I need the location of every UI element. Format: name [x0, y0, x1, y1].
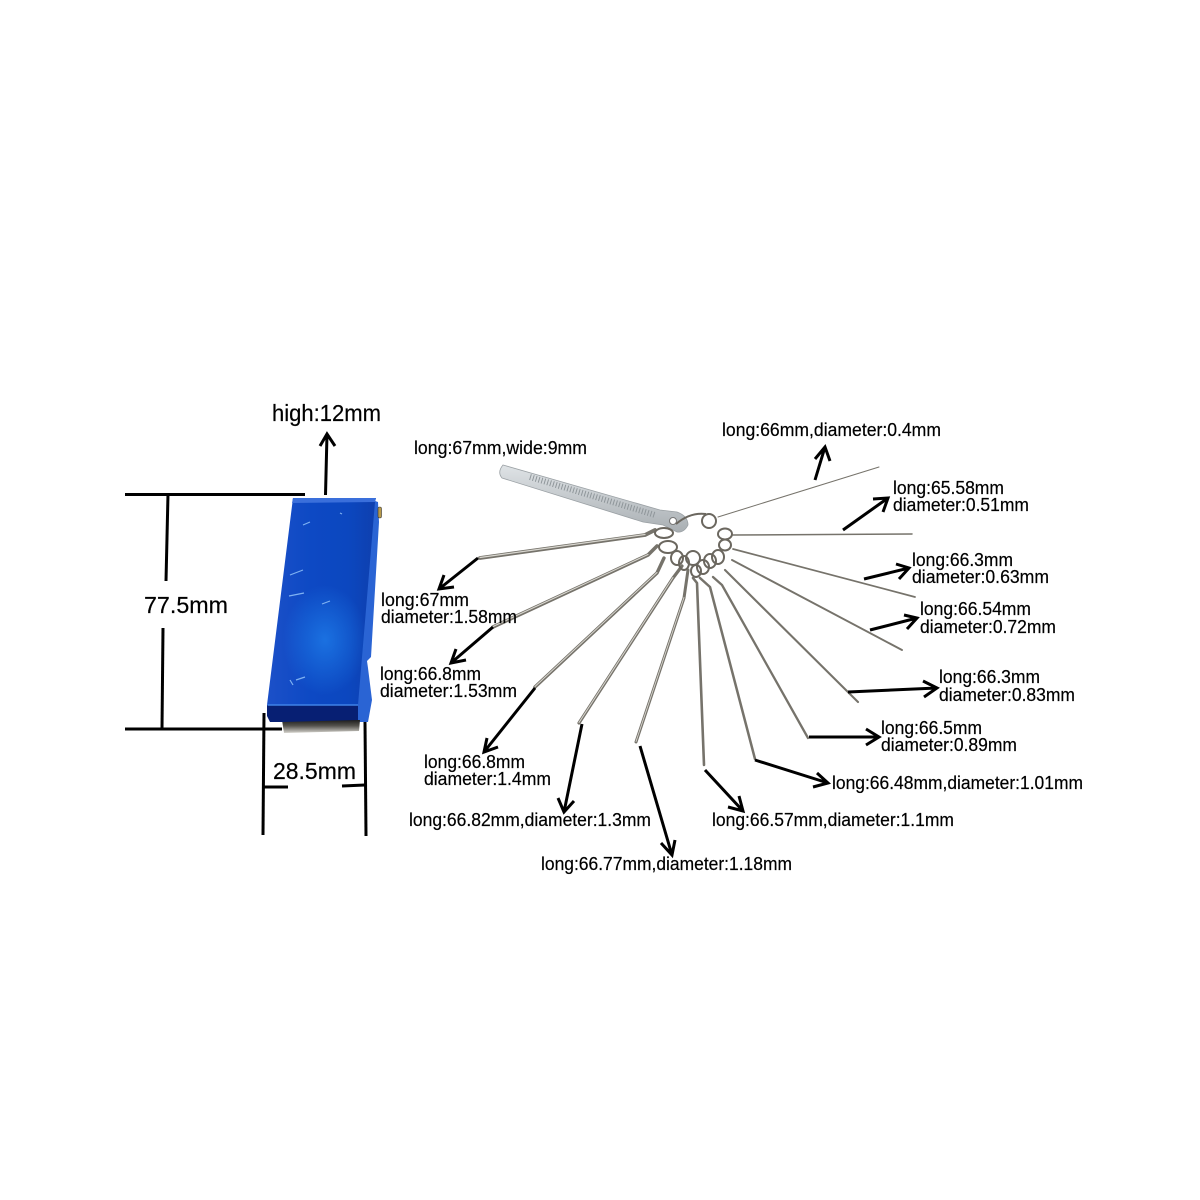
- arrow: [640, 746, 675, 855]
- dimension: 28.5mm width: [263, 713, 366, 836]
- case front face: [267, 498, 376, 705]
- key ring wire: [676, 514, 706, 524]
- label: long:67mm: [381, 590, 469, 610]
- label: long:66.5mm: [881, 718, 982, 738]
- wire gauge set photo: [480, 465, 915, 765]
- needles right thin: [693, 467, 915, 765]
- callout: 0.72mm wire: [870, 599, 1056, 637]
- right tick: [342, 785, 365, 786]
- label: long:66.54mm: [920, 599, 1031, 619]
- label: long:66.57mm,diameter:1.1mm: [712, 810, 954, 830]
- arrow up: [320, 434, 335, 495]
- handle hole: [670, 518, 676, 524]
- callout: 1.3mm wire: [409, 724, 651, 830]
- callout: 0.83mm wire: [848, 667, 1075, 705]
- arrow: [755, 760, 828, 787]
- callout: 1.53mm wire: diameter:1.53mm: [380, 681, 517, 701]
- arrow: [484, 688, 535, 752]
- arrow: [864, 564, 909, 579]
- callout: 0.83mm wire: diameter:0.83mm: [939, 685, 1075, 705]
- arrow: [843, 498, 888, 530]
- callout: 1.4mm wire: diameter:1.4mm: [424, 769, 551, 789]
- case side strip: [356, 500, 379, 722]
- case bottom highlight: [268, 704, 358, 706]
- arrow: [439, 558, 478, 589]
- right extension line: [365, 722, 366, 836]
- dimension: high 12mm: [272, 400, 381, 495]
- label high: high:12mm: [272, 400, 381, 426]
- arrow: [705, 770, 743, 811]
- upper vertical: [166, 494, 168, 581]
- bottom extension line: [125, 728, 282, 730]
- label: long:66.48mm,diameter:1.01mm: [832, 773, 1083, 793]
- callout: 1.53mm wire: [380, 627, 517, 701]
- arrow: [558, 724, 582, 812]
- callout: 1.4mm wire: [424, 688, 551, 789]
- left tick: [263, 786, 288, 788]
- callout: 0.63mm wire: [864, 550, 1049, 587]
- callout: 0.72mm wire: diameter:0.72mm: [920, 617, 1056, 637]
- label: handle: long:67mm,wide:9mm: [414, 438, 587, 458]
- handle ribbing: [530, 477, 655, 515]
- arrow: [809, 729, 879, 745]
- label: long:66.82mm,diameter:1.3mm: [409, 810, 651, 830]
- callout: 1.58mm wire: diameter:1.58mm: [381, 607, 517, 627]
- callout: 0.89mm wire: [809, 718, 1017, 755]
- label: long:66.8mm: [424, 752, 525, 772]
- case metal clip: [282, 720, 360, 733]
- rings: [655, 514, 732, 577]
- top extension line: [125, 493, 305, 496]
- callout: 1.18mm wire: [541, 746, 792, 874]
- label 77.5mm: 77.5mm: [144, 592, 228, 618]
- left extension line: [263, 713, 264, 835]
- callout: 1.1mm wire: [705, 770, 954, 830]
- label: long:66.77mm,diameter:1.18mm: [541, 854, 792, 874]
- label: long:66mm,diameter:0.4mm: [722, 420, 941, 440]
- callout: 0.63mm wire: diameter:0.63mm: [912, 567, 1049, 587]
- label: long:66.3mm: [912, 550, 1013, 570]
- lower vertical: [162, 628, 163, 729]
- needles left thick: [480, 530, 688, 742]
- callout: 0.4mm wire: [722, 420, 941, 480]
- callout: 1.58mm wire: [381, 558, 517, 627]
- case hinge pin: [378, 507, 382, 518]
- case top bevel: [292, 498, 376, 503]
- label 28.5mm: 28.5mm: [273, 758, 356, 784]
- callout: 1.01mm wire: [755, 760, 1083, 793]
- case scratch highlights: [289, 513, 342, 685]
- arrow: [870, 615, 917, 630]
- callout: 0.51mm wire: [843, 478, 1029, 530]
- callout: 0.89mm wire: diameter:0.89mm: [881, 735, 1017, 755]
- case sheen: [283, 585, 367, 695]
- blue case: [267, 498, 382, 733]
- callout: 0.51mm wire: diameter:0.51mm: [893, 495, 1029, 515]
- arrow: [451, 627, 493, 663]
- label: long:66.8mm: [380, 664, 481, 684]
- label: long:65.58mm: [893, 478, 1004, 498]
- label: long:66.3mm: [939, 667, 1040, 687]
- case bottom edge: [267, 705, 358, 722]
- arrow: [848, 681, 937, 697]
- arrow: [815, 447, 830, 480]
- handle: [500, 465, 688, 532]
